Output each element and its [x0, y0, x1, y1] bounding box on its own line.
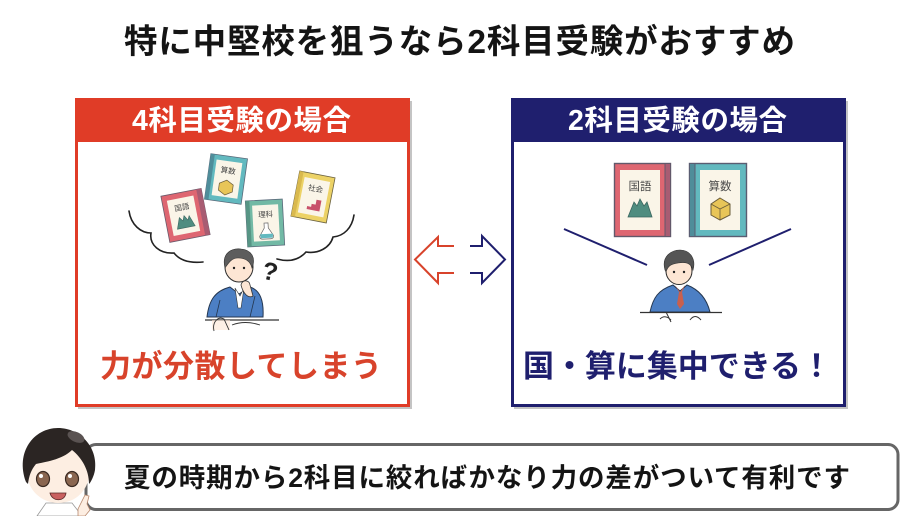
book: math tilted: 算数: [220, 164, 237, 176]
book: science tilted: [245, 199, 285, 247]
focus line right: [709, 229, 791, 265]
book: math: 算数: [708, 179, 732, 193]
caption: focus on Japanese and math: 国・算に集中できる！: [523, 349, 832, 384]
panel heading: 4 subjects: [75, 98, 410, 142]
panel: 2 subjects: [511, 98, 848, 409]
arrow: left red: [415, 237, 454, 283]
caption: power is scattered: 力が分散してしまう: [100, 349, 382, 384]
book: math: [690, 164, 746, 236]
student writing: [640, 250, 722, 322]
focus line left: [564, 229, 647, 265]
book: social studies tilted: 社会: [307, 182, 325, 195]
arrow: right navy: [470, 236, 505, 283]
book: Japanese: 国語: [628, 180, 652, 193]
book: Japanese: [614, 164, 670, 236]
panel heading: 2 subjects: [511, 98, 846, 142]
book: social studies tilted: [291, 171, 335, 223]
character: presenter: [23, 428, 95, 516]
title: 特に中堅校を狙うなら2科目受験がおすすめ: [124, 23, 795, 61]
book: science tilted: 理科: [258, 209, 274, 219]
callout text: 夏の時期から2科目に絞ればかなり力の差がついて有利です: [124, 463, 850, 493]
book: Japanese tilted: [161, 188, 210, 242]
panel heading: 4 subjects: 4科目受験の場合: [132, 105, 351, 137]
icon: question mark: ?: [260, 257, 280, 287]
book: math tilted: [204, 154, 248, 204]
callout box: [86, 444, 898, 510]
student thinking: [205, 249, 279, 331]
panel: 4 subjects: [75, 98, 412, 409]
panel heading: 2 subjects: 2科目受験の場合: [568, 105, 787, 137]
thought cloud right: [277, 215, 354, 261]
book: Japanese tilted: 国語: [174, 201, 191, 213]
thought cloud left: [129, 211, 203, 262]
